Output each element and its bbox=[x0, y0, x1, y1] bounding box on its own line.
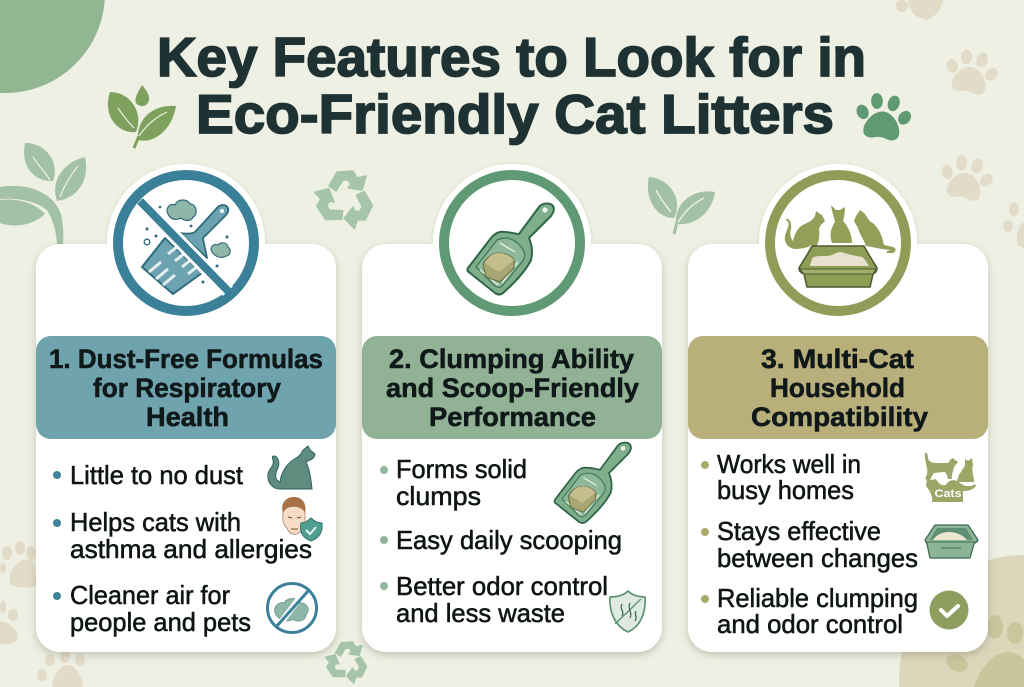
decoration: corner circle bbox=[0, 0, 105, 93]
bullet: better odor control: and less waste bbox=[396, 598, 565, 628]
section heading band bbox=[36, 336, 336, 439]
circle backing bbox=[107, 164, 265, 322]
section heading band: for Respiratory bbox=[93, 373, 281, 403]
panel: multi-cat household bbox=[688, 164, 988, 652]
bullet: forms solid clumps: clumps bbox=[396, 481, 481, 511]
bullet: reliable clumping: and odor control bbox=[717, 609, 903, 639]
icon: small scoop bbox=[554, 443, 631, 523]
section heading band: 3. Multi-Cat bbox=[761, 344, 914, 374]
icon: odor shield bbox=[610, 591, 645, 632]
section heading band: Performance bbox=[429, 402, 596, 432]
decoration: faded recycle bottom bbox=[322, 642, 370, 685]
section heading band: Compatibility bbox=[751, 402, 928, 432]
icon: group of cats: Cats bbox=[934, 488, 962, 500]
bullet: asthma and allergies: asthma and allergies bbox=[70, 534, 312, 564]
section heading band: Household bbox=[770, 373, 905, 403]
bullet: asthma and allergies: Helps cats with bbox=[70, 507, 241, 537]
circle backing bbox=[433, 164, 591, 322]
bullet: better odor control: Better odor control bbox=[396, 571, 608, 601]
bullet: easy daily scooping: Easy daily scooping bbox=[396, 525, 622, 555]
bullet: cleaner air bbox=[53, 580, 251, 637]
bullet: cleaner air: people and pets bbox=[70, 607, 251, 637]
decoration: bottom right circle and paw bbox=[899, 555, 1024, 687]
icon: person with shield bbox=[282, 497, 322, 541]
decoration: faded recycle top bbox=[310, 171, 377, 231]
icon: green paw bbox=[851, 89, 916, 143]
icon: check badge bbox=[930, 590, 968, 630]
decoration: green sprig beside title bbox=[108, 85, 176, 148]
bullet: busy homes bbox=[701, 449, 861, 505]
panel: dust-free formulas bbox=[36, 164, 336, 652]
bullet: cleaner air: Cleaner air for bbox=[70, 580, 230, 610]
section heading band: and Scoop-Friendly bbox=[386, 373, 639, 403]
icon: three cats and litter box bbox=[759, 164, 917, 322]
section heading band: Health bbox=[146, 402, 229, 432]
bullet: stays effective: between changes bbox=[717, 543, 918, 573]
bullet: busy homes: Works well in bbox=[717, 449, 861, 479]
icon: crossed out dusty scoop bbox=[107, 164, 265, 322]
bullet: reliable clumping bbox=[701, 583, 918, 639]
icon: green litter tray bbox=[925, 525, 978, 558]
bullet: busy homes: busy homes bbox=[717, 475, 854, 505]
section heading band bbox=[362, 336, 662, 439]
bullet: better odor control bbox=[380, 571, 608, 628]
title: Eco-Friendly Cat Litters bbox=[196, 83, 834, 145]
bullet: stays effective bbox=[701, 516, 918, 573]
card background bbox=[362, 244, 662, 652]
bullet: little to no dust: Little to no dust bbox=[70, 460, 244, 490]
icon: sitting cat bbox=[268, 446, 315, 489]
section heading band: 2. Clumping Ability bbox=[389, 344, 634, 374]
bullet: forms solid clumps: Forms solid bbox=[396, 454, 527, 484]
bullet: stays effective: Stays effective bbox=[717, 516, 881, 546]
decoration: faded leaves bbox=[648, 177, 715, 234]
card background bbox=[688, 244, 988, 652]
bullet: forms solid clumps bbox=[380, 454, 527, 511]
icon: group of cats bbox=[925, 453, 976, 502]
icon: scoop with clump bbox=[433, 164, 591, 322]
section heading band: 1. Dust-Free Formulas bbox=[49, 344, 323, 374]
decoration: faded plant left bbox=[0, 143, 86, 244]
icon: no dust cloud bbox=[268, 584, 316, 632]
card background bbox=[36, 244, 336, 652]
title bbox=[157, 26, 866, 145]
bullet: asthma and allergies bbox=[53, 507, 312, 564]
bullet: reliable clumping: Reliable clumping bbox=[717, 583, 918, 613]
section heading band bbox=[688, 336, 988, 439]
title: Key Features to Look for in bbox=[157, 26, 866, 88]
panel: clumping ability bbox=[362, 164, 662, 652]
circle backing bbox=[759, 164, 917, 322]
